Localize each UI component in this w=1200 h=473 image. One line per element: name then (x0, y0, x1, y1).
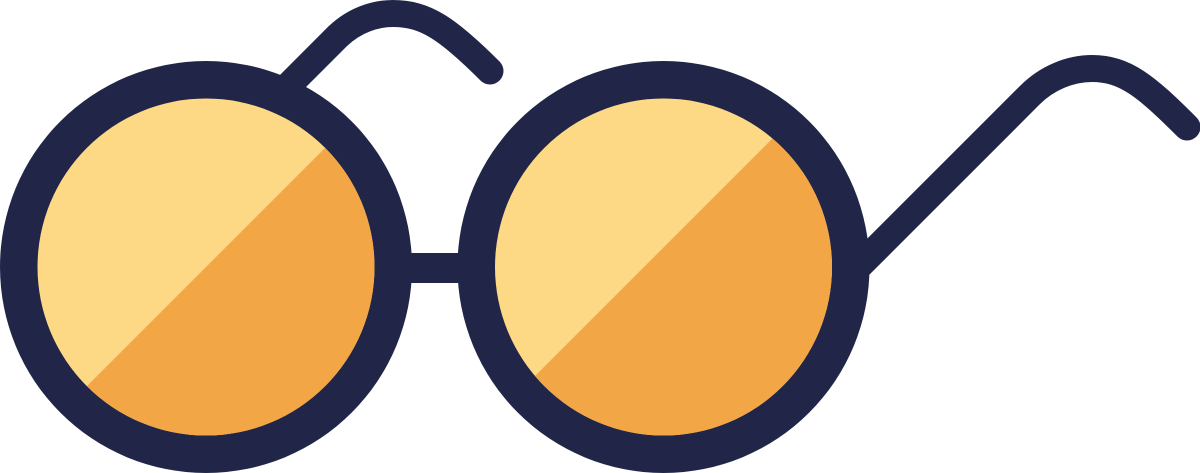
bridge (405, 253, 465, 283)
left lens (0, 61, 412, 473)
front temple arm (850, 68, 1187, 275)
back temple arm (285, 14, 490, 89)
right lens (458, 61, 870, 473)
